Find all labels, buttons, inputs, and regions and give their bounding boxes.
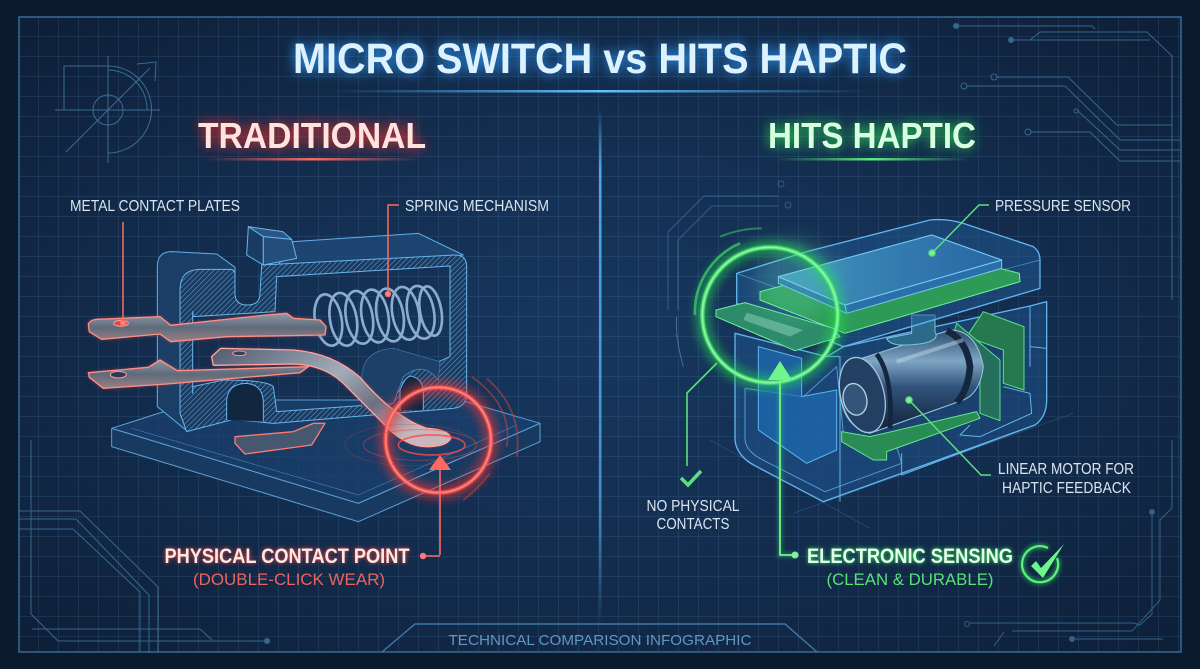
callout: electronic sensing: ELECTRONIC SENSING [807, 545, 1013, 568]
callout: electronic sensing: (CLEAN & DURABLE) [826, 570, 994, 589]
label: no physical contacts [646, 498, 740, 533]
green circuit plate [760, 248, 1020, 333]
diagram: micro switch [88, 227, 540, 522]
label: no physical contacts: CONTACTS [656, 516, 730, 533]
callout: physical contact point [164, 545, 410, 589]
lower green tab [716, 303, 840, 351]
rear green bracket [967, 312, 1024, 390]
label: pressure sensor: PRESSURE SENSOR [995, 198, 1131, 215]
panel: traditional micro switch [70, 115, 549, 589]
callout: physical contact point: PHYSICAL CONTACT POINT [164, 545, 410, 568]
heading: traditional: TRADITIONAL [198, 115, 426, 156]
linear motor [832, 330, 983, 437]
label: metal contact plates: METAL CONTACT PLATES [70, 198, 240, 215]
icon: large check [1022, 544, 1064, 582]
footer: TECHNICAL COMPARISON INFOGRAPHIC [448, 632, 752, 649]
decoration: circuit traces above haptic module [668, 181, 791, 337]
pressure sensor plate [778, 235, 1002, 313]
decoration: circuit traces bottom right [964, 440, 1172, 646]
leader: pressure sensor [929, 205, 989, 256]
arrow: electronic sensing [768, 361, 798, 558]
decoration: circuit traces bottom left [19, 440, 270, 652]
label: linear motor: LINEAR MOTOR FOR [998, 461, 1134, 478]
decoration: circuit traces top right [954, 24, 1180, 300]
leader: metal contact plates [120, 222, 126, 326]
title: MICRO SWITCH vs HITS HAPTIC [293, 35, 907, 83]
motor stem [887, 315, 936, 345]
callout: physical contact point: (DOUBLE-CLICK WEAR) [193, 570, 385, 589]
actuator button [247, 227, 297, 265]
decoration: blueprint drawing top left [55, 56, 160, 163]
callout: physical contact point: PHYSICAL CONTACT POINT [164, 545, 410, 568]
bottom terminal [235, 423, 325, 454]
sensing highlight [676, 228, 838, 383]
leader: spring mechanism [386, 205, 399, 296]
middle green bracket [950, 323, 1000, 421]
footer [382, 624, 817, 652]
diagram: haptic module [676, 220, 1073, 528]
faint axis lines [710, 413, 1073, 528]
leader: no physical contacts [687, 363, 717, 466]
contact point highlight [345, 377, 518, 500]
arrow: physical contact point [420, 455, 451, 559]
panel: hits haptic [646, 115, 1134, 589]
leader: linear motor [906, 397, 991, 475]
heading: hits haptic: HITS HAPTIC [768, 115, 976, 156]
heading: hits haptic: HITS HAPTIC [768, 115, 976, 156]
spring [311, 284, 446, 348]
title: MICRO SWITCH vs HITS HAPTIC [293, 35, 907, 83]
title underline [330, 90, 870, 92]
heading: traditional: TRADITIONAL [198, 115, 426, 156]
upper contact plate [88, 313, 326, 342]
label: linear motor [998, 461, 1134, 497]
base plate [112, 400, 540, 522]
label: spring mechanism: SPRING MECHANISM [405, 198, 549, 215]
icon: small check [681, 471, 701, 485]
switch housing [157, 233, 467, 432]
label: no physical contacts: NO PHYSICAL [646, 498, 740, 515]
callout: electronic sensing: ELECTRONIC SENSING [807, 545, 1013, 568]
label: linear motor: HAPTIC FEEDBACK [1002, 480, 1132, 497]
bottom green rail [842, 412, 980, 460]
bent contact lever [212, 348, 451, 447]
centre divider [599, 108, 602, 623]
upper cover [737, 220, 1040, 347]
lower housing [735, 302, 1047, 502]
lower contact plate [88, 360, 308, 388]
callout: electronic sensing [807, 545, 1013, 589]
